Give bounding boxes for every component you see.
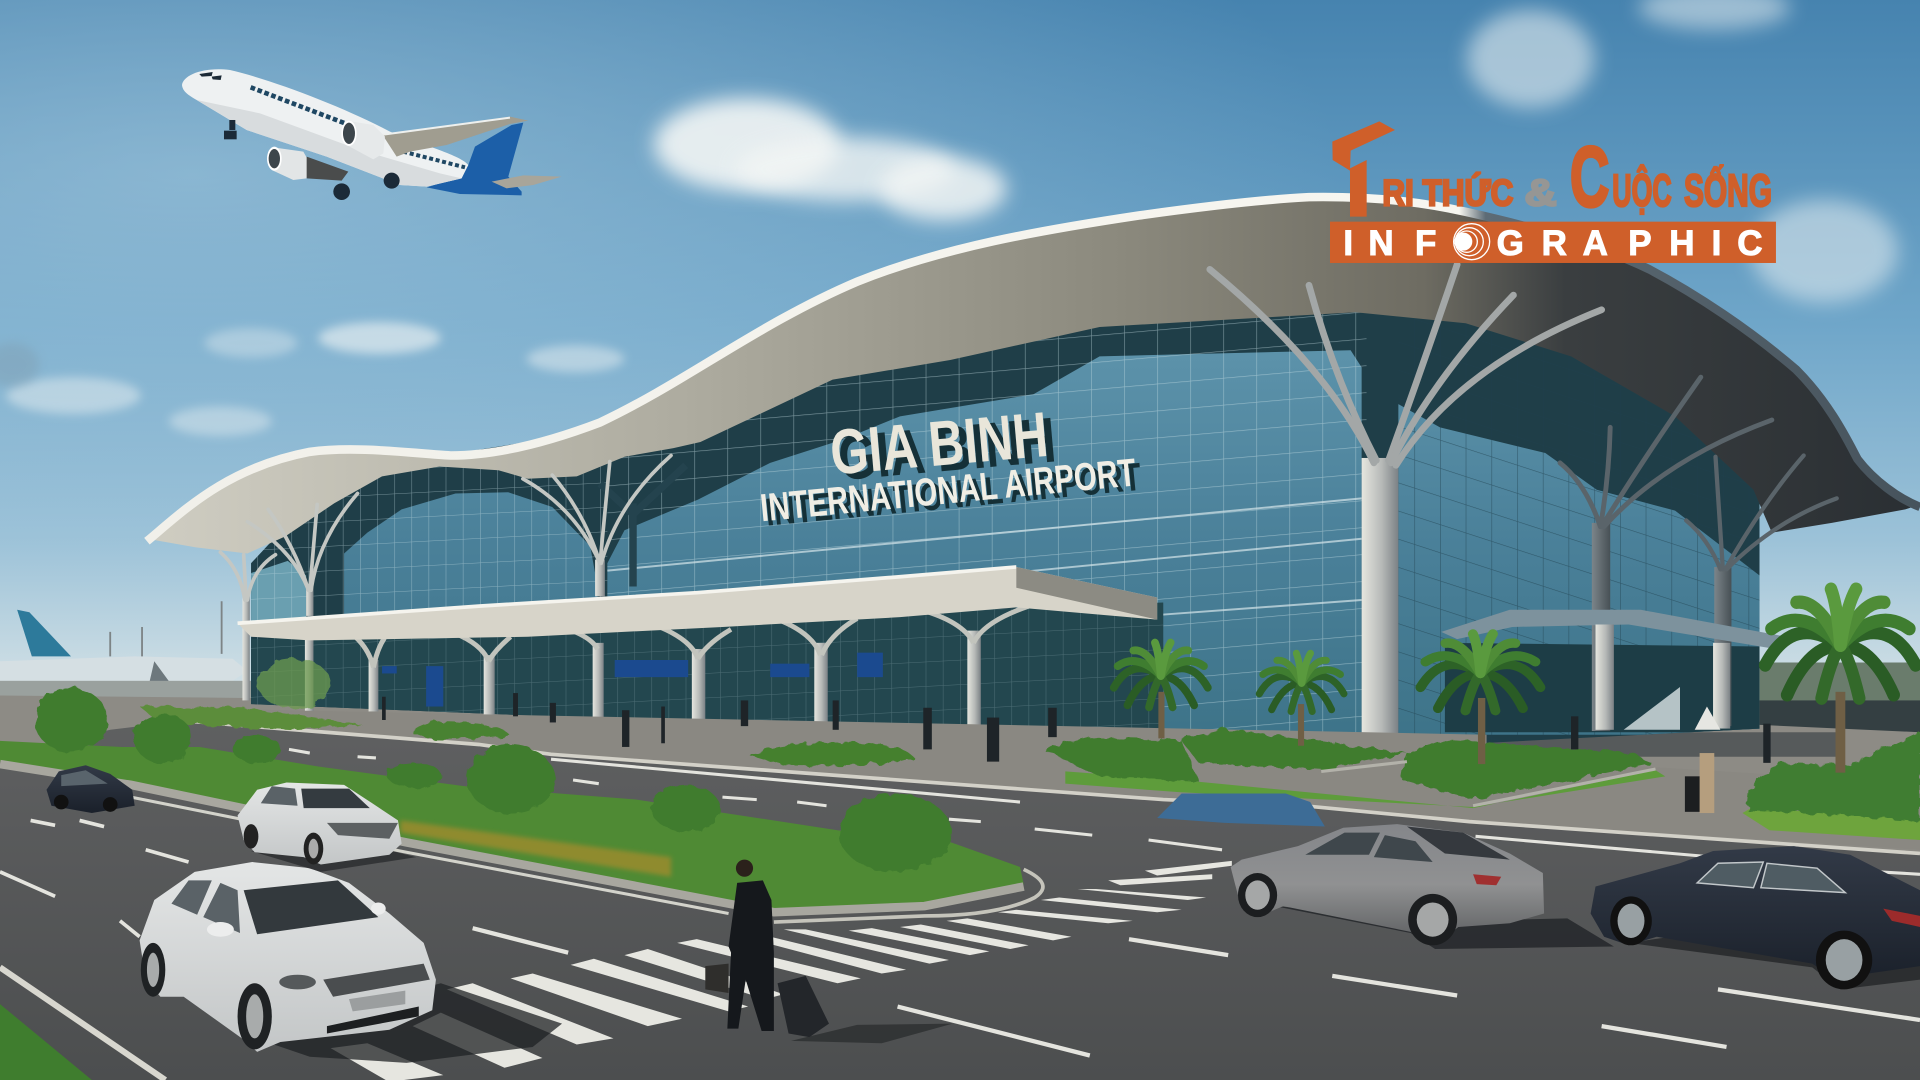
logo banner — [1330, 222, 1776, 263]
logo wordmark — [1382, 130, 1772, 225]
logo wordmark: UỘC — [1612, 165, 1672, 216]
cabin windows — [251, 87, 345, 123]
median curb nose — [774, 869, 1043, 922]
canopy front lip — [1016, 567, 1157, 620]
far right lawn — [1742, 808, 1920, 840]
main tree column — [1210, 264, 1602, 747]
logo: Tri thức & Cuộc sống Infographic — [1330, 121, 1776, 263]
median green island — [0, 741, 1024, 910]
right tree column — [1560, 377, 1772, 731]
logo wordmark: SỐNG — [1684, 165, 1772, 216]
car: navy sedan — [1591, 846, 1920, 989]
traveller in beige coat — [1685, 753, 1714, 813]
sign: airport name — [758, 398, 1143, 535]
traveller with luggage — [705, 860, 829, 1037]
median curb — [0, 764, 1024, 912]
fuselage — [182, 69, 468, 187]
car: large white sedan — [140, 862, 562, 1063]
landing gear — [224, 120, 400, 200]
tailplane — [492, 175, 562, 188]
cockpit windows — [199, 72, 222, 80]
main wing — [383, 117, 528, 157]
side entrance canopy — [1441, 610, 1793, 649]
tree reflections — [600, 480, 676, 586]
car: dark sedan far left — [47, 765, 135, 813]
bottom left road edge — [0, 967, 165, 1080]
grid centre — [607, 294, 1367, 759]
far right tree column — [1686, 456, 1837, 726]
hedge A — [1180, 729, 1407, 770]
sign: airport name: GIA BINH — [827, 399, 1051, 489]
roof top band — [147, 197, 1920, 541]
terminal sidewalk — [159, 708, 1920, 850]
logo O globe icon — [1454, 224, 1490, 260]
distant pedestrians — [382, 693, 1771, 763]
palm tree 1 — [1114, 643, 1208, 738]
flower strip — [400, 820, 671, 877]
palm tree 4 — [1765, 589, 1916, 773]
engine right — [341, 121, 385, 159]
engine left — [267, 147, 348, 181]
road surface — [0, 720, 1920, 1080]
bottom left grass — [0, 1004, 92, 1080]
sign board near entrance — [1695, 707, 1720, 730]
far left glazing — [251, 561, 306, 624]
wing upper edge — [383, 118, 510, 135]
centre glazing — [607, 350, 1362, 749]
rear windows — [403, 152, 465, 167]
tail fin — [427, 123, 523, 195]
grid left — [251, 446, 608, 713]
sign: airport name: INTERNATIONAL AIRPORT — [764, 456, 1143, 535]
sign: airport name: INTERNATIONAL AIRPORT — [758, 451, 1138, 530]
road reflection patch — [1157, 793, 1325, 827]
airplane — [182, 69, 562, 200]
logo wordmark: C — [1570, 130, 1609, 225]
sky light glow — [0, 0, 1920, 700]
canopy top edge — [238, 567, 1016, 623]
pedestrian shadow — [791, 1024, 953, 1043]
sign: airport name: GIA BINH — [835, 404, 1059, 494]
glass facade — [233, 294, 1776, 759]
median shrubs — [34, 688, 951, 872]
lower hall grid — [251, 608, 1164, 728]
logo wordmark: & — [1525, 173, 1557, 214]
stair — [1624, 687, 1680, 730]
hedge left of A — [1043, 737, 1199, 781]
hedge strip — [749, 742, 913, 766]
background treeline right — [1760, 662, 1920, 735]
logo banner text: INF — [1343, 224, 1436, 263]
main entrance canopy — [238, 567, 1157, 640]
right garden lawn — [1065, 770, 1665, 808]
hedge curb — [1321, 762, 1656, 806]
far right hedge — [1746, 732, 1920, 820]
clouds — [0, 0, 1898, 436]
lower glass hall — [251, 602, 1164, 728]
bright beams — [607, 498, 1362, 624]
car: silver sedan — [1231, 824, 1614, 949]
crosswalk stripes — [331, 861, 1232, 1080]
dark plaza right — [1487, 732, 1840, 757]
logo banner text: GRAPHIC — [1497, 224, 1763, 263]
palm tree 2 — [1259, 653, 1344, 746]
car: white hatchback — [238, 782, 416, 872]
logo T mark — [1332, 121, 1395, 217]
left tree columns — [220, 456, 671, 713]
under canopy columns — [1596, 624, 1730, 730]
fuselage shade — [197, 100, 462, 187]
trees beside terminal left — [257, 659, 331, 708]
distant parked aircraft — [0, 610, 257, 698]
lane markings — [0, 749, 1920, 1056]
road edge strip — [189, 721, 1920, 853]
light poles — [110, 601, 222, 656]
interior signs — [382, 653, 883, 707]
roof soffit — [147, 195, 1920, 553]
grid right — [1398, 413, 1760, 735]
left arch glazing — [344, 492, 598, 624]
logo banner text — [1343, 224, 1763, 263]
hedge B — [1402, 740, 1652, 800]
road edge line by median — [131, 797, 729, 913]
right lower darker glass — [1445, 643, 1760, 732]
palm tree 3 — [1420, 634, 1540, 764]
canopy columns — [344, 602, 1041, 741]
far left hedge — [140, 707, 362, 730]
ground plaza — [0, 696, 1920, 1080]
hedge near entrance — [411, 721, 509, 739]
right glazing — [1398, 404, 1760, 735]
background buildings right — [1760, 700, 1920, 732]
logo wordmark: RI THỨC — [1382, 172, 1513, 214]
